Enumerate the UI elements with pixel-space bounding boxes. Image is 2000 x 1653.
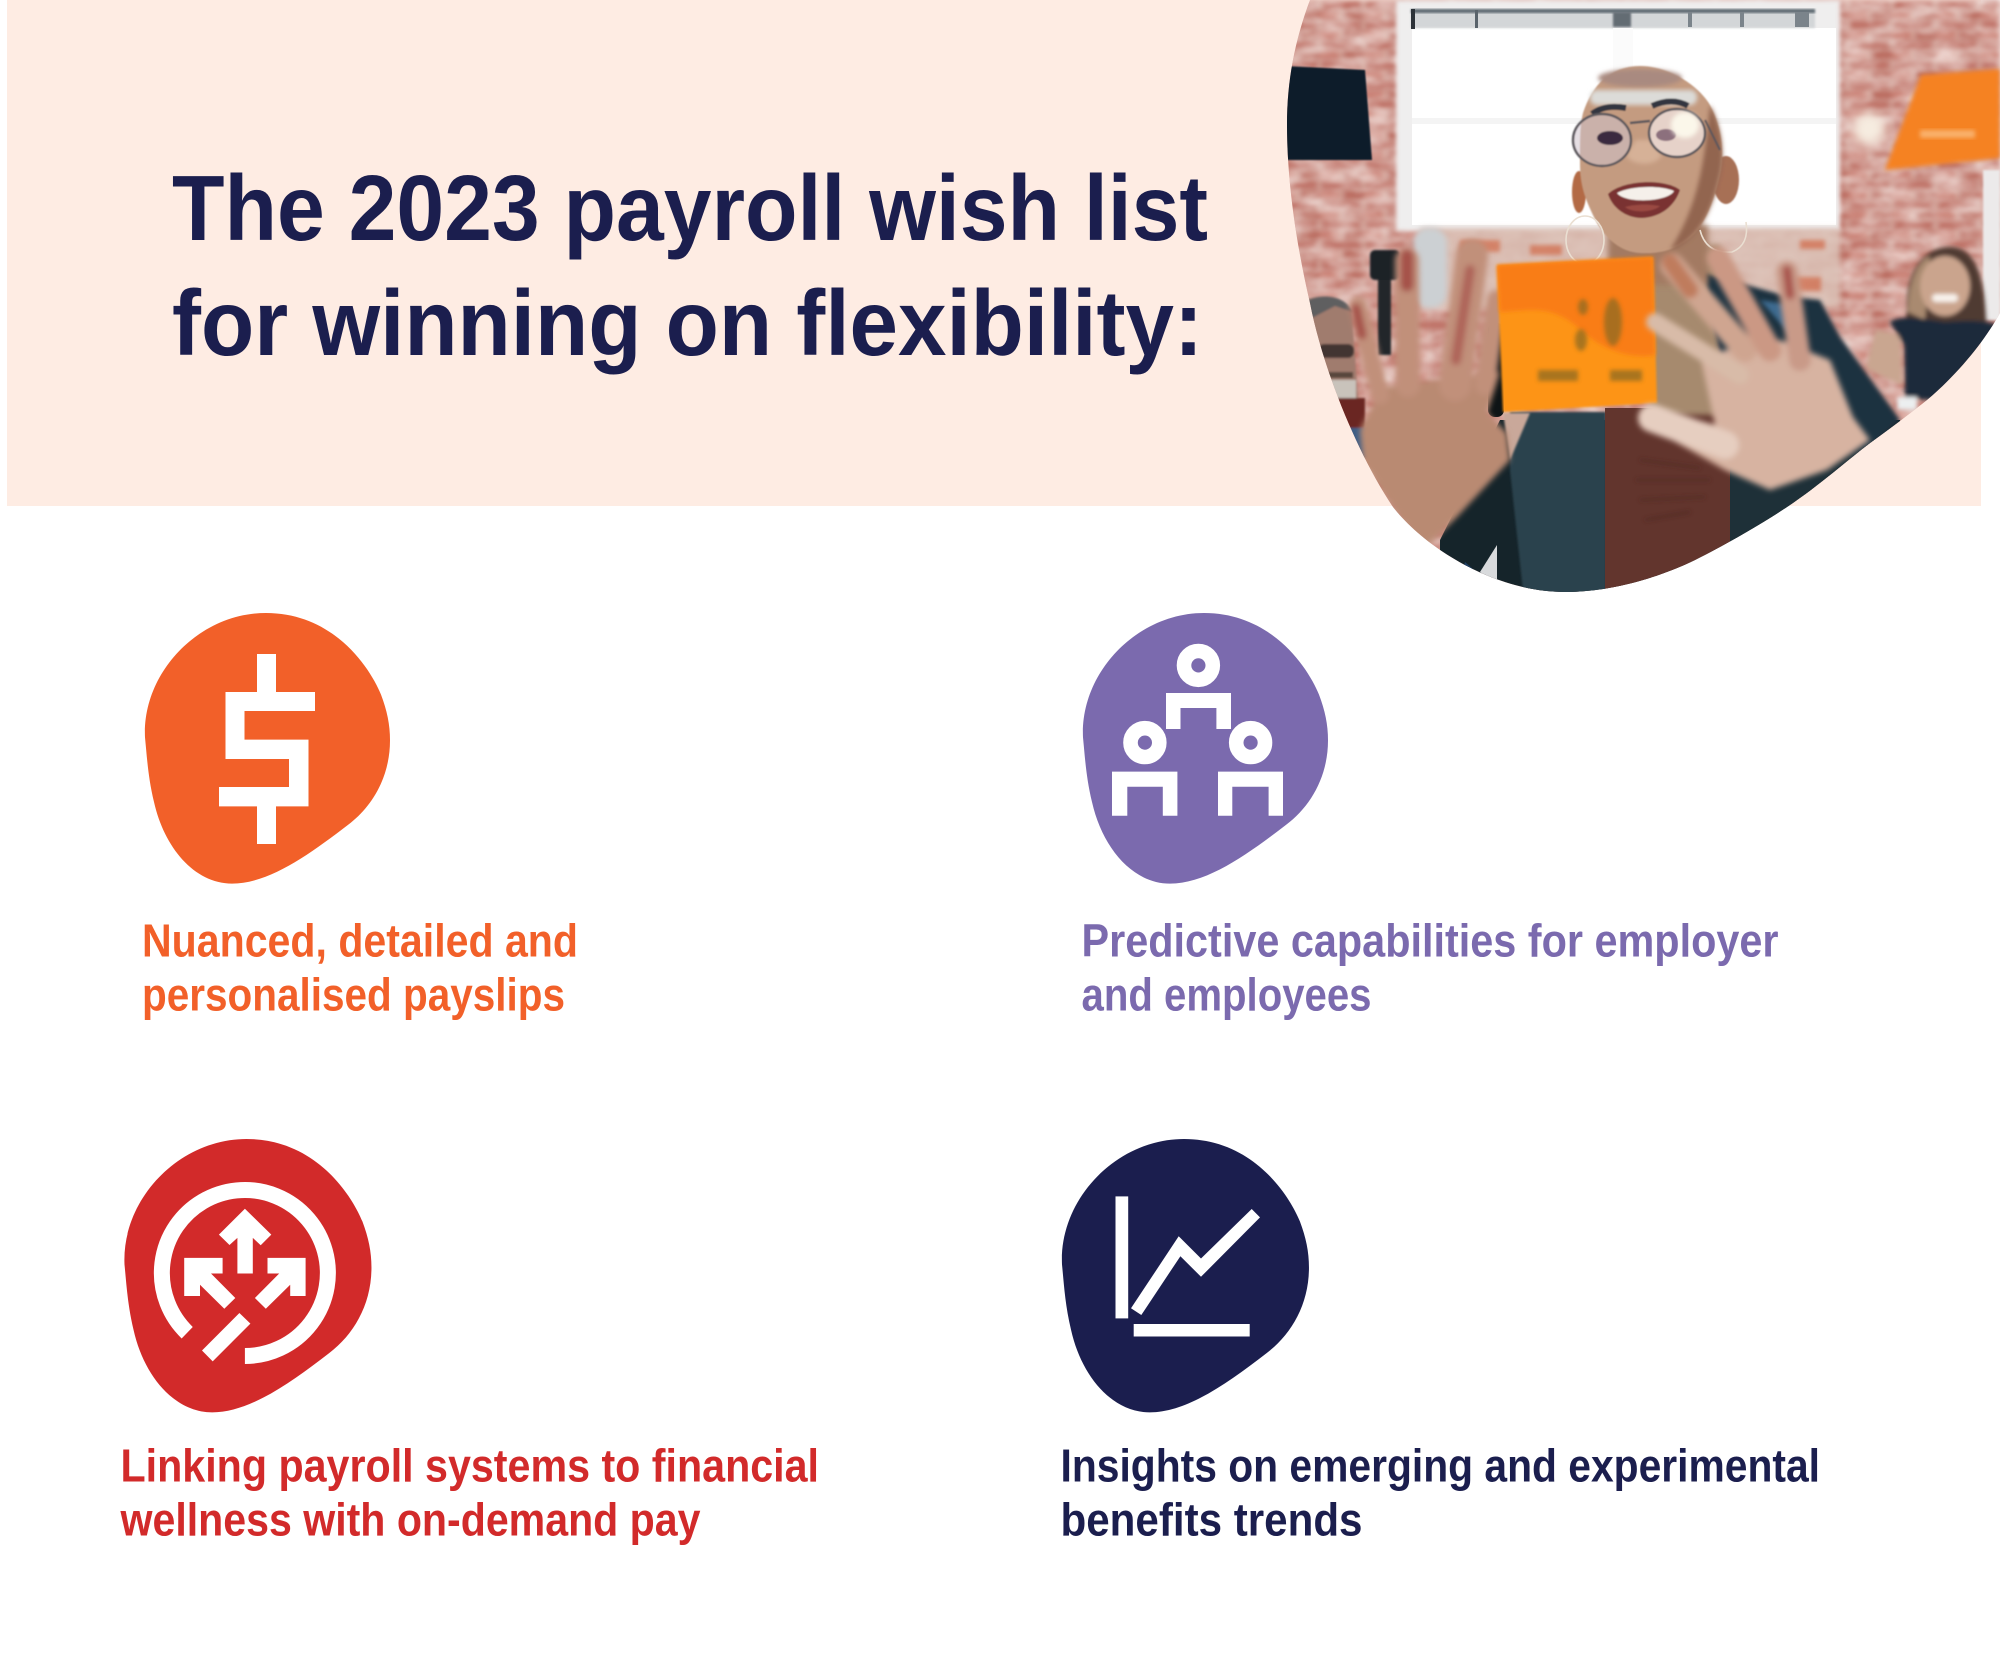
person at left [1305,250,1400,458]
wall-mounted screen [1285,66,1372,160]
title: for winning on flexibility: [172,271,1203,375]
text: benefits insights [1060,1440,1820,1546]
text: financial wellness: Linking payroll systems to financial [120,1440,819,1492]
nose [1626,140,1662,164]
window [1396,0,1840,231]
text: financial wellness [120,1440,819,1546]
icon: three people hierarchy in purple blob [1083,613,1328,884]
title [172,156,1208,375]
person at right [1866,247,1998,410]
feature: financial wellness [120,1139,819,1546]
woman's torso [1440,323,1900,600]
text: predictive capabilities: Predictive capabilities for employer [1082,914,1779,966]
sticky note, top right [1885,69,2000,170]
feature: benefits insights [1060,1139,1820,1546]
hoop earrings [1566,216,1747,264]
photo: smiling woman placing a sticky note on glass [1280,0,2000,600]
glass reflection near window edge [1413,228,1447,308]
icon: line chart in navy blob [1062,1139,1309,1412]
header panel background [7,0,1981,506]
text: benefits insights: Insights on emerging and experimental [1060,1440,1820,1492]
text: predictive capabilities [1082,914,1779,1020]
right-hand window strip [1983,170,2000,320]
text: predictive capabilities: and employees [1082,968,1372,1020]
icon: circular arrows in red blob [124,1139,371,1412]
text: financial wellness: wellness with on-demand pay [120,1494,701,1546]
feature: payslips [142,613,578,1020]
icon: dollar sign in orange blob [145,613,390,884]
right hand [1645,258,1870,490]
left hand [1356,255,1510,550]
smile [1608,182,1680,218]
sticky note, centre [1497,257,1657,412]
text: payslips: personalised payslips [142,968,565,1020]
glasses [1573,109,1720,166]
text: payslips [142,914,578,1020]
text: benefits insights: benefits trends [1060,1494,1362,1546]
woman's head [1572,66,1739,285]
jacket right shoulder [1703,273,1900,470]
text: payslips: Nuanced, detailed and [142,914,578,966]
chest behind sticky right [1650,245,1720,415]
feature: predictive capabilities [1082,613,1779,1020]
title: The 2023 payroll wish list [172,156,1208,260]
